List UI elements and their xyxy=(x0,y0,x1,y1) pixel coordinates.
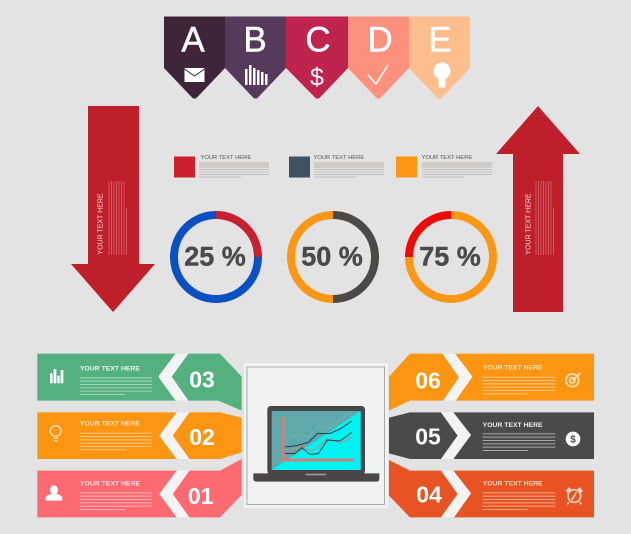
donut 50 percent xyxy=(291,215,375,299)
text lines xyxy=(80,492,152,510)
donut 75 percent xyxy=(409,215,493,299)
banner 05 dark xyxy=(389,412,594,459)
banner 01 coral xyxy=(37,459,242,517)
banner 06 orange: YOUR TEXT HERE xyxy=(483,365,543,372)
text lines xyxy=(483,433,555,451)
banner 02 orange: 02 xyxy=(189,424,215,450)
legend item orange: YOUR TEXT HERE xyxy=(422,155,472,161)
tab D with check icon xyxy=(348,16,409,98)
legend item red xyxy=(174,155,269,178)
banner 06 orange: 06 xyxy=(415,367,441,393)
text lines xyxy=(80,377,152,395)
donut 50 percent: 50 % xyxy=(301,242,363,272)
icon: bars xyxy=(245,65,268,85)
icon: bar chart xyxy=(50,369,63,383)
banner 03 green: 03 xyxy=(189,367,215,393)
tab E with lightbulb icon xyxy=(409,16,470,98)
text lines xyxy=(483,377,555,394)
legend item red: YOUR TEXT HERE xyxy=(200,155,251,161)
icon: lightbulb xyxy=(434,62,450,88)
down arrow xyxy=(71,106,155,312)
banner 05 dark: 05 xyxy=(415,424,441,450)
tab C with dollar icon xyxy=(286,16,348,98)
icon: target xyxy=(566,373,580,387)
down arrow: YOUR TEXT HERE xyxy=(98,193,104,255)
banner 01 coral: YOUR TEXT HERE xyxy=(80,481,140,488)
banner 01 coral: 01 xyxy=(188,483,214,509)
text lines xyxy=(109,181,126,255)
legend item orange xyxy=(396,155,492,178)
up arrow: YOUR TEXT HERE xyxy=(526,193,532,255)
tab E with lightbulb icon: E xyxy=(428,20,452,60)
tab B with bars icon xyxy=(225,16,286,98)
icon: dollar coin xyxy=(566,432,580,446)
text lines xyxy=(80,433,152,450)
banner 05 dark: YOUR TEXT HERE xyxy=(483,422,543,429)
icon: person xyxy=(46,485,62,501)
banner 04 red-orange xyxy=(389,460,594,517)
donut 25 percent: 25 % xyxy=(184,242,246,272)
tab D with check icon: D xyxy=(367,20,393,60)
icon: envelope xyxy=(184,68,204,82)
banner 06 orange xyxy=(389,354,594,411)
tab A with envelope icon: A xyxy=(181,20,205,60)
text lines xyxy=(536,181,554,255)
banner 04 red-orange: YOUR TEXT HERE xyxy=(483,481,543,488)
icon: alarm clock xyxy=(567,488,582,504)
banner 02 orange xyxy=(37,412,242,459)
up arrow xyxy=(496,106,580,312)
icon: lightbulb xyxy=(50,426,61,441)
legend item slate xyxy=(289,155,384,178)
donut 75 percent: 75 % xyxy=(419,242,481,272)
panel: laptop xyxy=(244,363,388,508)
banner 03 green: YOUR TEXT HERE xyxy=(80,365,140,372)
legend item slate: YOUR TEXT HERE xyxy=(314,155,364,161)
tab C with dollar icon: C xyxy=(305,20,331,60)
banner 02 orange: YOUR TEXT HERE xyxy=(80,421,140,428)
banner 04 red-orange: 04 xyxy=(416,481,442,507)
icon: check xyxy=(368,65,388,84)
icon: dollar: $ xyxy=(310,64,324,92)
donut 25 percent xyxy=(174,215,258,299)
icon: dollar coin: $ xyxy=(570,435,576,446)
text lines xyxy=(483,492,555,510)
tab B with bars icon: B xyxy=(243,20,267,60)
tab A with envelope icon xyxy=(164,16,225,98)
banner 03 green xyxy=(37,354,242,411)
